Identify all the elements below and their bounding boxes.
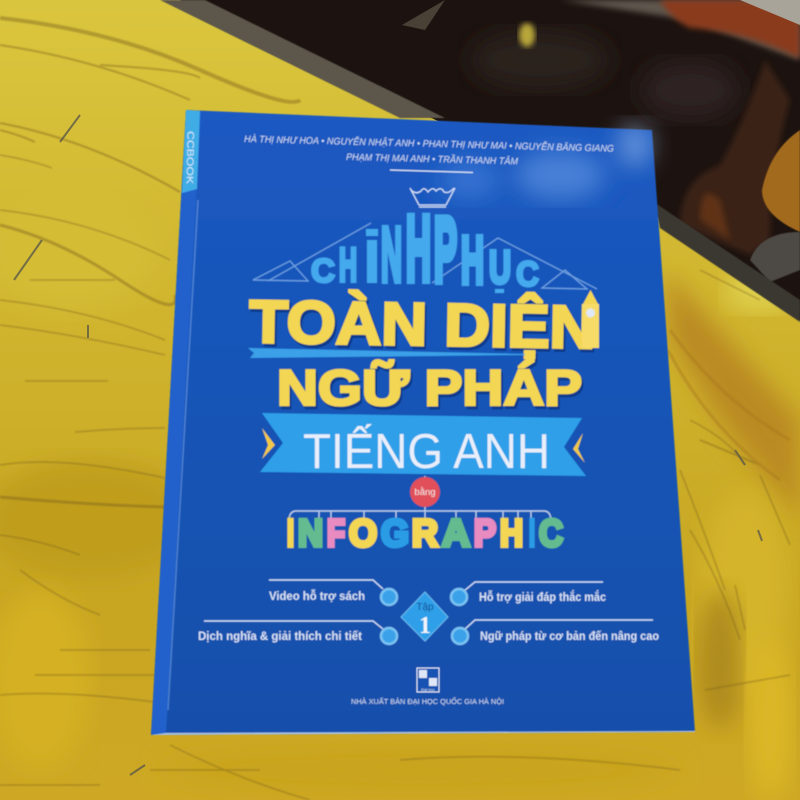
banner: TIẾNG ANH (260, 413, 586, 479)
INFOGRAPHIC wordmark: C (539, 513, 563, 555)
title: TOÀN DIỆN: TOÀN DIỆN (249, 288, 596, 361)
icon: crown (410, 188, 455, 207)
INFOGRAPHIC wordmark: I (287, 513, 294, 555)
INFOGRAPHIC wordmark: I (529, 513, 535, 555)
leaf (762, 130, 800, 232)
title: NGỮ PHÁP: NGỮ PHÁP (279, 362, 584, 419)
INFOGRAPHIC wordmark: P (474, 513, 496, 555)
authors: HÀ THỊ NHƯ HOA • NGUYỄN NHẬT ANH • PHAN THỊ NHƯ MAI • NGUYỄN BĂNG GIANG (244, 133, 615, 155)
title: NGỮ PHÁP: NGỮ PHÁP (277, 359, 582, 416)
title: TOÀN DIỆN: TOÀN DIỆN (251, 291, 598, 364)
authors: PHẠM THỊ MAI ANH • TRẦN THANH TÂM (346, 152, 518, 168)
publisher tab: CCBOOK (182, 110, 200, 193)
INFOGRAPHIC wordmark: R (412, 513, 438, 555)
title: CHINH PHỤC: N (381, 212, 402, 298)
book (151, 110, 695, 735)
publisher name: NHÀ XUẤT BẢN ĐẠI HỌC QUỐC GIA HÀ NỘI (351, 696, 504, 706)
INFOGRAPHIC wordmark: O (349, 513, 377, 555)
badge: bằng (410, 477, 440, 507)
title: CHINH PHỤC: P (434, 200, 457, 301)
banner: TIẾNG ANH: TIẾNG ANH (303, 425, 550, 479)
spine (151, 110, 201, 735)
ribbon under TOÀN DIỆN (248, 348, 525, 358)
feature callouts: Ngữ pháp từ cơ bản đến nâng cao (480, 631, 659, 643)
publisher tab: CCBOOK: CCBOOK (184, 131, 195, 185)
connector tree (289, 476, 551, 519)
publisher logo (417, 668, 439, 692)
icon: clock tower (582, 290, 599, 348)
title: CHINH PHỤC: H (461, 223, 484, 298)
feature callouts (198, 580, 659, 644)
INFOGRAPHIC wordmark: A (442, 513, 470, 555)
feature callouts: Hỗ trợ giải đáp thắc mắc (479, 591, 607, 604)
roof triangle lines (253, 223, 597, 289)
book cover (151, 110, 695, 735)
title: CHINH PHỤC: C (311, 252, 335, 289)
volume badge: Tập 1: Tập (416, 602, 434, 613)
publisher logo: Đại học (421, 687, 435, 692)
volume badge: Tập 1 (401, 592, 448, 641)
INFOGRAPHIC wordmark: N (298, 513, 323, 555)
title: CHINH PHỤC: U (489, 241, 511, 293)
authors (244, 133, 615, 172)
INFOGRAPHIC wordmark (287, 513, 563, 555)
title: CHINH PHỤC: H (406, 198, 431, 300)
volume badge: Tập 1: 1 (419, 613, 431, 639)
title: CHINH PHỤC (311, 198, 539, 301)
background: dark soil and bark (160, 0, 800, 322)
INFOGRAPHIC wordmark: F (327, 513, 345, 555)
INFOGRAPHIC wordmark: G (381, 513, 409, 555)
feature callouts: Dịch nghĩa & giải thích chi tiết (198, 631, 362, 643)
title: CHINH PHỤC: H (339, 238, 357, 291)
right wood streak (665, 270, 800, 520)
INFOGRAPHIC wordmark: H (500, 513, 523, 555)
title: CHINH PHỤC: C (516, 255, 539, 294)
trunk (680, 60, 790, 255)
glare (440, 123, 651, 200)
badge: bằng: bằng (414, 487, 436, 498)
feature callouts: Video hỗ trợ sách (269, 590, 365, 603)
